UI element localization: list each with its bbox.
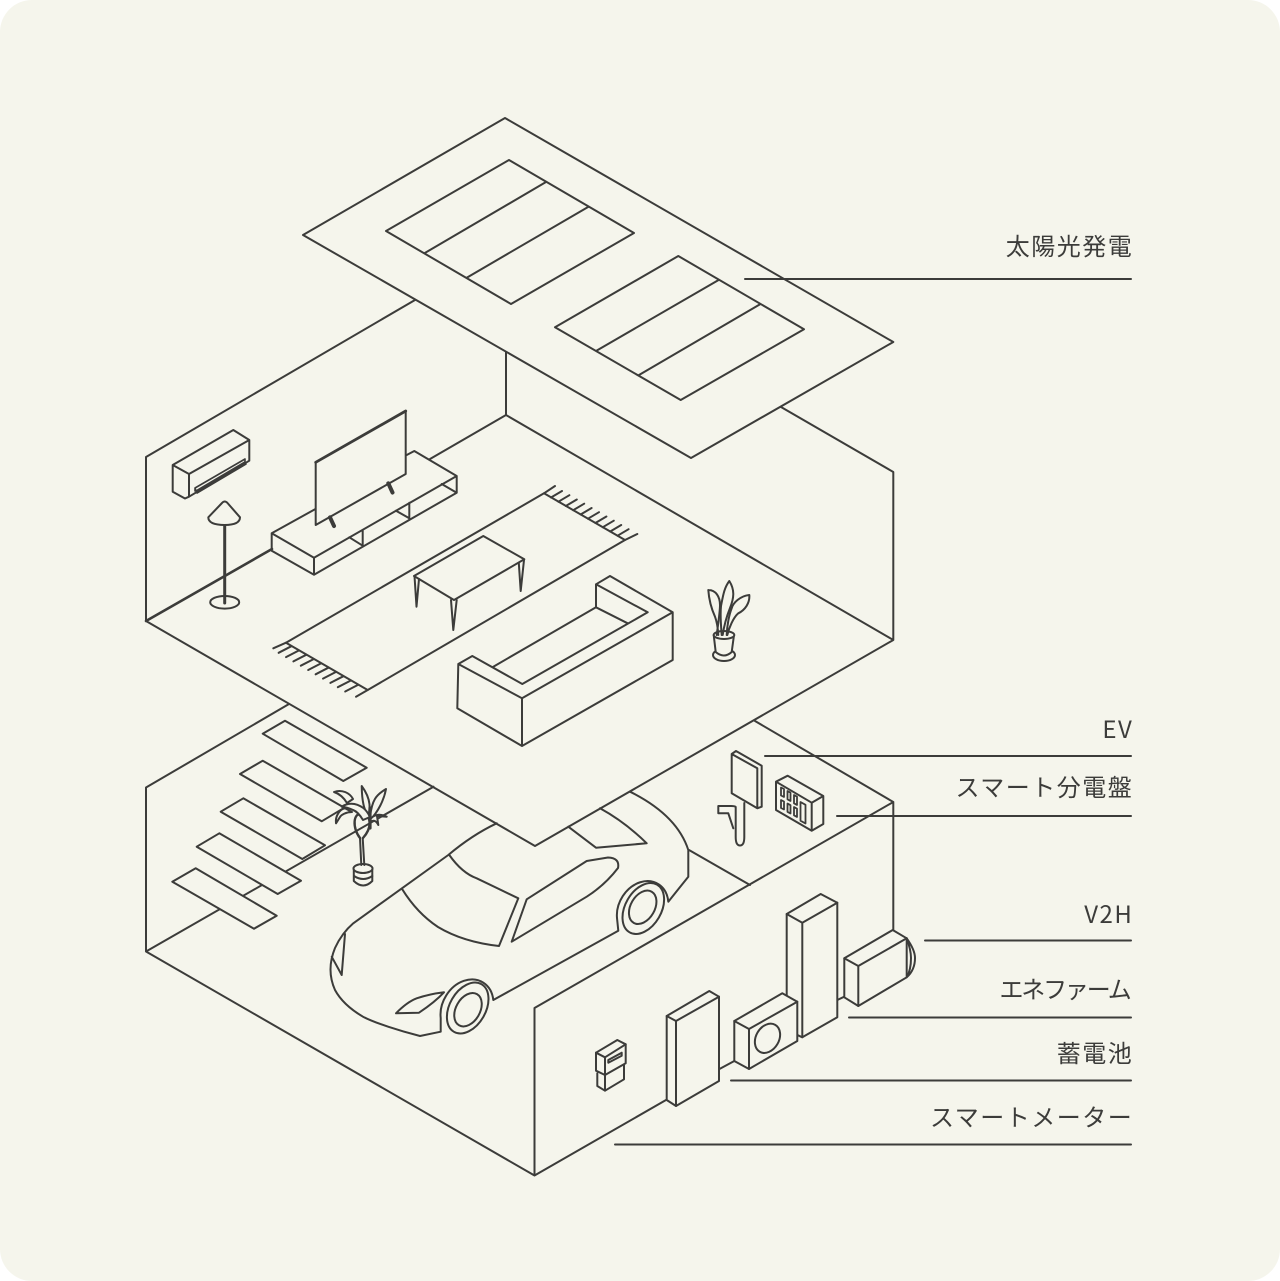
icon: sofa [457,576,673,746]
label: storage battery: 蓄電池 [1057,1034,1133,1069]
icon: potted plant [708,581,749,661]
label: V2H: V2H [1084,895,1133,930]
icon: palm plant [334,786,387,886]
icon: television [316,411,406,526]
rug [273,486,637,697]
label: solar power: 太陽光発電 [1006,227,1133,262]
living floor [146,300,893,846]
icon: outdoor unit [734,993,797,1069]
icon: air conditioner [173,430,249,498]
icon: EV charger [718,751,762,846]
icon: smart meter [596,1040,626,1091]
icon: tall ene-farm tank [787,894,837,1037]
icon: storage battery [667,991,719,1106]
ground floor: garage room [146,704,915,1176]
roof with solar panels [303,118,893,458]
stepping stones [172,721,367,929]
solar array 1 [386,160,634,304]
label: smart distribution board: スマート分電盤 [956,768,1133,803]
label: smart meter: スマートメーター [930,1098,1133,1133]
icon: V2H unit [844,930,915,1006]
label: ene-farm: エネファーム [1000,970,1131,1005]
solar array 2 [555,256,804,400]
icon: floor lamp [208,502,240,609]
label: EV: EV [1102,710,1133,745]
car [330,792,688,1041]
icon: coffee table [414,536,524,630]
icon: TV stand [272,451,457,575]
icon: smart distribution board [776,776,823,831]
